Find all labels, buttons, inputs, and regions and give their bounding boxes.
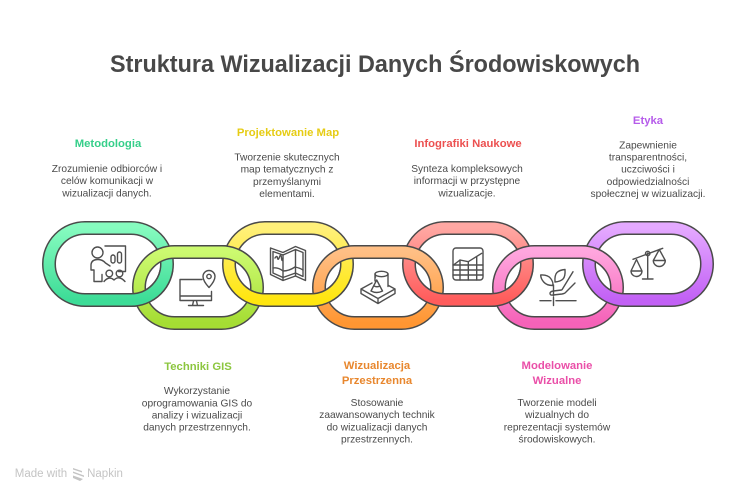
chain overlap: ring 6 top over ring 7 [582,245,620,270]
chain ring: 6 Modelowanie Wizualne [499,252,617,323]
text: Techniki GIS description: oprogramowania GIS do [142,398,253,410]
text: Modelowanie Wizualne description: reprezentacji systemów [504,422,611,434]
title: Struktura Wizualizacji Danych Środowiskowych [110,50,640,78]
heading: Techniki GIS: Techniki GIS [164,361,232,373]
text: Wizualizacja Przestrzenna description: Stosowanie [351,398,404,409]
heading: Modelowanie Wizualne: Modelowanie [522,360,592,372]
heading: Wizualizacja Przestrzenna: Wizualizacja [344,360,411,372]
text: Metodologia description: celów komunikacji w [61,176,154,187]
watermark: Made with Napkin [15,468,123,481]
text: Etyka description: społecznej w wizualizacji. [591,189,705,200]
chain ring: 3 Projektowanie Map [229,228,347,300]
text: Modelowanie Wizualne description: wizualnych do [524,410,589,421]
chain ring: 4 Wizualizacja Przestrzenna [319,252,437,323]
text: Modelowanie Wizualne description: środowiskowych. [518,434,596,446]
text: Techniki GIS description: analizy i wizualizacji [152,410,242,422]
icon: chart on grid [453,248,483,280]
chain overlap: ring 3 over ring 4 [312,270,354,307]
chain overlap: ring 2 top over ring 3 [222,245,260,270]
chain overlap: ring 5 over ring 6 [491,270,534,307]
text: Wizualizacja Przestrzenna description: zaawansowanych technik [319,410,436,421]
text: Infografiki Naukowe description: wizualizacje. [437,188,496,200]
text: Wizualizacja Przestrzenna description: do wizualizacji danych [327,422,427,434]
text: Projektowanie Map description: map tematycznych z [241,164,333,176]
heading: Projektowanie Map: Projektowanie Map [237,127,339,139]
text: Metodologia description: Zrozumienie odbiorców i [52,164,162,175]
chain overlap: ring 4 top over ring 5 [402,245,440,270]
text: Infografiki Naukowe description: informacji w przystępne [414,176,521,187]
chain ring: 1 Metodologia [49,228,167,300]
text: Etyka description: odpowiedzialności [607,177,689,188]
heading: Metodologia: Metodologia [75,138,142,150]
icon: folded map [270,246,306,280]
text: Infografiki Naukowe description: Synteza kompleksowych [411,164,523,175]
icon: monitor with location pin [180,270,215,306]
icon: presenter with audience [91,246,126,282]
heading: Etyka: Etyka [633,115,664,127]
watermark: Made with Napkin: Made with [15,468,67,480]
watermark: Made with Napkin: Napkin [87,468,123,480]
chain ring: 5 Infografiki Naukowe [409,228,527,300]
text: Techniki GIS description: Wykorzystanie [164,386,230,397]
text: Wizualizacja Przestrzenna description: przestrzennych. [341,434,413,446]
icon: geometric shapes on platform [361,268,395,304]
text: Techniki GIS description: danych przestrzennych. [143,422,251,434]
text: Projektowanie Map description: elementami. [259,189,315,200]
text: Modelowanie Wizualne description: Tworzenie modeli [517,398,597,409]
heading: Wizualizacja Przestrzenna: Przestrzenna [342,375,413,387]
text: Etyka description: transparentności, [609,152,687,164]
chain overlap: ring 1 over ring 2 [132,270,174,307]
heading: Modelowanie Wizualne: Wizualne [533,375,581,387]
text: Etyka description: Zapewnienie [619,140,677,152]
text: Projektowanie Map description: przemyślanymi [253,177,321,188]
chain ring: 2 Techniki GIS [139,252,257,323]
chain ring: 7 Etyka [589,228,707,300]
icon: balance scales [631,248,665,279]
text: Etyka description: uczciwości i [621,164,675,176]
text: Projektowanie Map description: Tworzenie skutecznych [234,152,340,164]
icon: plant and hand [540,270,576,306]
heading: Infografiki Naukowe: Infografiki Naukowe [414,138,522,150]
text: Metodologia description: wizualizacji danych. [61,188,152,200]
